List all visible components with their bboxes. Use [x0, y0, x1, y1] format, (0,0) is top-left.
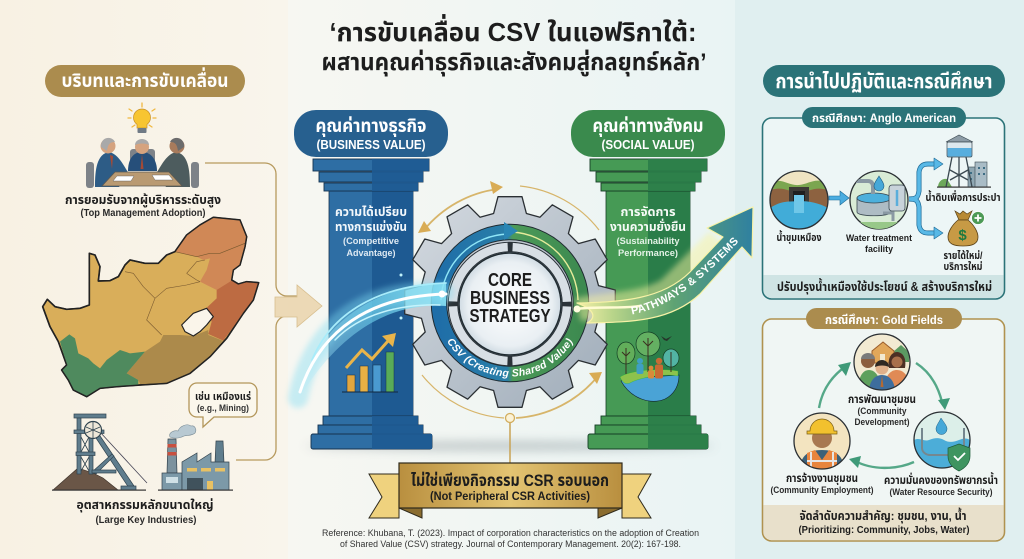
icon: growth bar chart — [342, 333, 398, 392]
text: raw water for supply: น้ำดิบเพื่อการประปา — [926, 190, 1000, 204]
text: new income: บริการใหม่ — [944, 260, 983, 273]
card: Anglo American — [762, 107, 1004, 299]
text: competitive advantage: ความได้เปรียบ — [335, 205, 407, 219]
arrow: branching outputs — [909, 158, 943, 239]
text: water treatment facility: Water treatment — [846, 233, 913, 244]
callout: e.g. mining: เช่น เหมืองแร่ — [195, 390, 252, 403]
icon: mine water — [770, 171, 828, 229]
banner: not peripheral CSR — [369, 463, 651, 518]
arrow: mine to treatment — [829, 191, 849, 205]
connector: gear to banner — [506, 414, 514, 463]
text: top management adoption — [65, 193, 221, 219]
pillar: social value — [571, 110, 725, 449]
callout: e.g. mining — [189, 383, 257, 427]
pillar: business value — [294, 110, 448, 449]
text: sustainability performance: งานความยั่งยืน — [610, 218, 686, 234]
heading: context — [45, 65, 245, 97]
text: community employment — [770, 471, 874, 496]
text: water resource security: (Water Resource Security) — [890, 487, 992, 498]
text: community development: การพัฒนาชุมชน — [848, 393, 916, 406]
icon: community — [854, 334, 910, 392]
text: community employment: (Community Employment) — [770, 485, 874, 496]
callout: e.g. mining: (e.g., Mining) — [197, 403, 249, 413]
ring label: CSV (Creating Shared Value) — [448, 338, 574, 379]
arrow: pathways and systems ribbon — [572, 206, 754, 324]
text: new income — [944, 249, 983, 273]
text: top management adoption: การยอมรับจากผู้บริหารระดับสูง — [65, 193, 221, 208]
cycle arrows — [819, 363, 942, 468]
CSV ring — [430, 222, 590, 382]
text: community employment: การจ้างงานชุมชน — [786, 471, 858, 485]
icon: mine headframe — [52, 414, 147, 491]
panel: implementation and case studies — [762, 65, 1005, 541]
text: large key industries: อุตสาหกรรมหลักขนาดใหญ่ — [76, 498, 214, 512]
heading: business value — [294, 110, 448, 157]
core text: STRATEGY — [470, 306, 550, 326]
heading: social value — [571, 110, 725, 157]
text: new income: รายได้ใหม่/ — [944, 249, 983, 262]
footer band: Anglo American: ปรับปรุงน้ำเหมืองใช้ประโยชน์ & สร้างบริการใหม่ — [777, 278, 992, 294]
text: sustainability performance: การจัดการ — [620, 205, 676, 219]
icon: water security — [914, 412, 970, 471]
footer band: Anglo American — [764, 275, 1004, 298]
text: community development — [848, 393, 916, 428]
text: sustainability performance: Performance) — [618, 248, 678, 259]
ribbon label: PATHWAYS & SYSTEMS — [631, 238, 738, 314]
core circle — [459, 253, 561, 355]
text: water treatment facility: facility — [865, 244, 894, 255]
card header: Anglo American — [802, 107, 966, 128]
core text: BUSINESS — [470, 288, 550, 308]
card: Gold Fields — [762, 308, 1004, 541]
icon: money bag — [948, 211, 984, 246]
gear: core business strategy — [404, 196, 616, 408]
icon: money bag: $ — [958, 227, 967, 244]
text: large key industries — [76, 498, 214, 526]
text: water resource security — [884, 472, 998, 498]
footer band: Gold Fields — [764, 505, 1004, 540]
title — [322, 14, 706, 77]
card header: Anglo American: กรณีศึกษา: Anglo American — [812, 112, 956, 125]
heading: context: บริบทและการขับเคลื่อน — [62, 67, 228, 92]
arrow: blue business flow — [298, 274, 446, 400]
text: water treatment facility — [846, 233, 913, 255]
icon: treatment plant — [850, 171, 908, 230]
core text: CORE — [488, 270, 532, 290]
arrow: context into strategy — [275, 285, 322, 327]
banner: not peripheral CSR: (Not Peripheral CSR Activities) — [430, 491, 590, 503]
icon: light bulb — [128, 103, 156, 133]
map: South Africa — [43, 217, 259, 397]
text: large key industries: (Large Key Industries) — [96, 515, 196, 526]
pillar shadow — [305, 441, 715, 451]
card header: Gold Fields — [806, 308, 962, 329]
text: competitive advantage — [335, 205, 407, 259]
core text — [470, 270, 550, 326]
footer band: Gold Fields: จัดลำดับความสำคัญ: ชุมชน, งาน, น้ำ — [800, 507, 966, 523]
footer band: Gold Fields: (Prioritizing: Community, Jobs, Water) — [798, 524, 970, 536]
text: sustainability performance: (Sustainability — [616, 236, 680, 247]
heading: social value: คุณค่าทางสังคม — [592, 115, 704, 137]
gold cycle arcs — [422, 186, 599, 418]
icon: factory — [158, 425, 233, 491]
text: water resource security: ความมั่นคงของทรัพยากรน้ำ — [884, 472, 998, 487]
text: sustainability performance — [610, 205, 686, 259]
icon: water tower — [937, 135, 991, 188]
heading: business value: (BUSINESS VALUE) — [316, 138, 426, 152]
title: ‘การขับเคลื่อน CSV ในแอฟริกาใต้: — [330, 14, 696, 47]
text: top management adoption: (Top Management Adoption) — [80, 208, 206, 219]
connector lines to arrow — [205, 163, 297, 460]
heading: implementation: การนำไปปฏิบัติและกรณีศึกษา — [776, 71, 992, 93]
icon: trees, people and river — [617, 332, 679, 401]
heading: business value: คุณค่าทางธุรกิจ — [316, 115, 426, 137]
inner segmented ring — [453, 247, 567, 361]
text: mine water label: น้ำขุมเหมือง — [776, 230, 822, 244]
panel: context and drivers — [43, 65, 322, 526]
text: competitive advantage: ทางการแข่งขัน — [335, 220, 407, 234]
card header: Gold Fields: กรณีศึกษา: Gold Fields — [825, 313, 943, 327]
icon: community worker — [794, 413, 850, 471]
cycle arrowheads — [838, 362, 950, 468]
reference note: Reference: Khubana, T. (2023). Impact of corporation characteristics on the adoption of Creation — [322, 528, 699, 538]
heading: social value: (SOCIAL VALUE) — [602, 138, 694, 152]
title: ผสานคุณค่าธุรกิจและสังคมสู่กลยุทธ์หลัก’ — [322, 48, 706, 77]
icon: executives at a table — [86, 138, 199, 188]
banner: not peripheral CSR: ไม่ใช่เพียงกิจกรรม CSR รอบนอก — [411, 472, 609, 490]
reference note: of Shared Value (CSV) strategy. Journal of Contemporary Management. 20(2): 167-198. — [340, 539, 681, 549]
text: competitive advantage: Advantage) — [346, 248, 396, 259]
text: community development: (Community — [858, 406, 907, 417]
reference note — [322, 528, 699, 549]
text: community development: Development) — [854, 417, 910, 428]
arrowheads on gold arcs — [418, 181, 602, 384]
heading: implementation — [763, 65, 1005, 97]
text: competitive advantage: (Competitive — [343, 236, 399, 247]
